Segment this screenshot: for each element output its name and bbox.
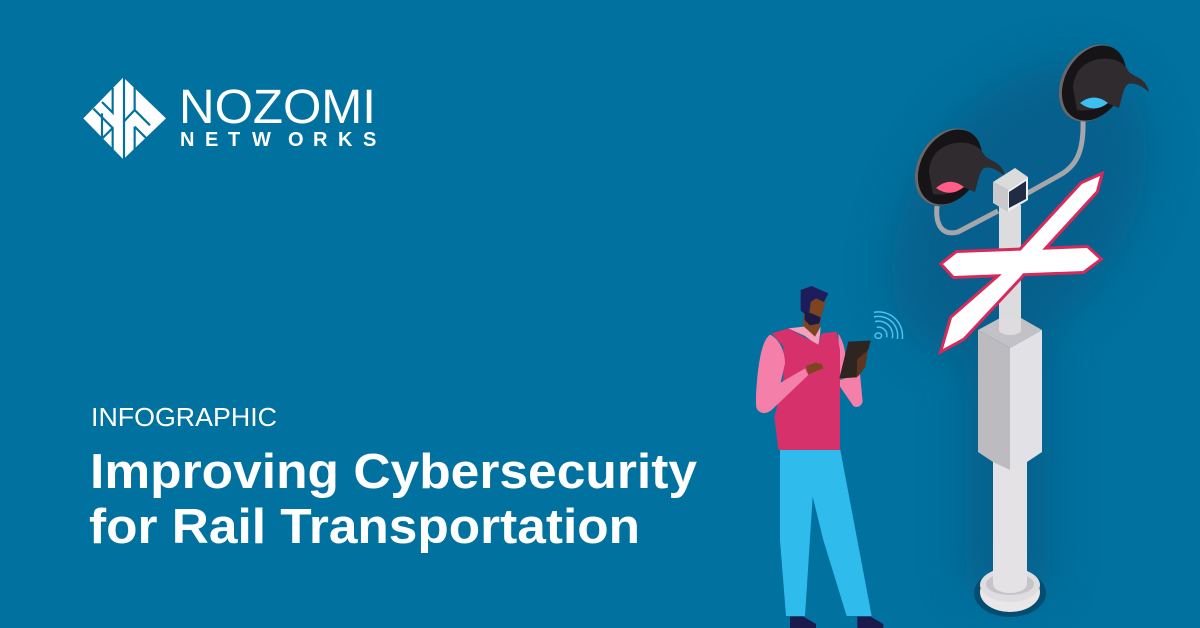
torso, arms and head xyxy=(756,286,871,450)
logo mark xyxy=(83,73,166,163)
signal lamp: left, red xyxy=(902,116,1005,218)
base plate xyxy=(974,568,1046,617)
logo xyxy=(83,73,376,163)
legs xyxy=(780,448,883,628)
soft shadow behind signal post xyxy=(839,15,1200,590)
title: for Rail Transportation xyxy=(89,500,640,554)
person with tablet xyxy=(756,286,903,628)
cross outline xyxy=(943,176,1100,349)
signal lamp: right, blue xyxy=(1046,32,1149,134)
title: Improving Cybersecurity xyxy=(90,445,697,499)
upper column xyxy=(999,205,1021,335)
railway signal post xyxy=(902,32,1149,617)
eyebrow label: INFOGRAPHIC xyxy=(91,402,277,432)
logo wordmark: Networks: NETWORKS xyxy=(180,129,376,151)
post housing xyxy=(978,318,1042,470)
crossing sign (St Andrew's cross) xyxy=(943,176,1100,349)
signal cables xyxy=(937,120,1083,233)
lower column xyxy=(993,455,1027,593)
icon: wifi signal xyxy=(874,312,903,339)
cross white face xyxy=(943,176,1100,349)
title xyxy=(89,445,697,554)
sensor box xyxy=(993,168,1028,212)
logo wordmark: Nozomi: NOZOMI xyxy=(179,81,376,134)
